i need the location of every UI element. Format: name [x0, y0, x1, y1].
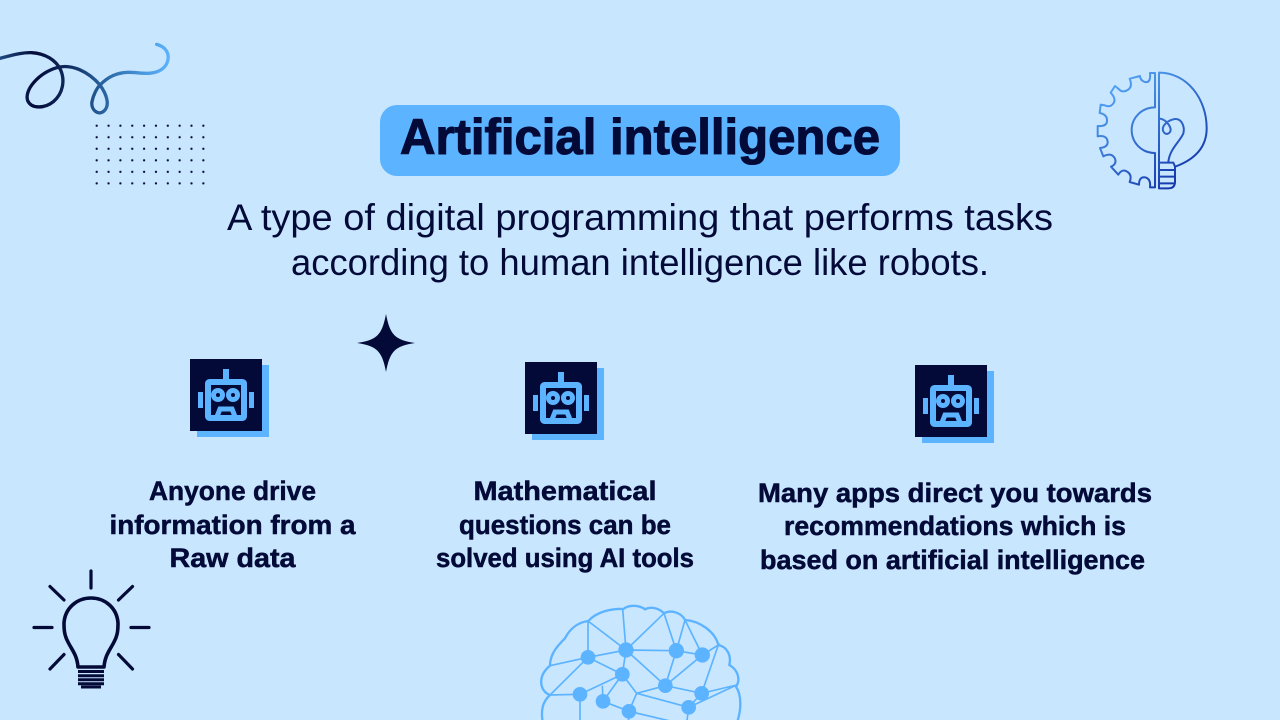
text block: raw data: Anyone drive: [149, 476, 316, 506]
icon: light bulb with rays: [34, 571, 149, 687]
title pill: [380, 105, 900, 176]
text block: mathematical questions: [436, 476, 694, 573]
network links: [550, 609, 737, 720]
decorative curl: [0, 44, 168, 113]
text block: mathematical questions: Mathematical: [474, 476, 656, 506]
icon: four-point star: [357, 314, 415, 372]
subtitle: [227, 197, 1053, 283]
icon: robot 3: [915, 365, 994, 443]
network nodes: [573, 642, 710, 719]
text block: app recommendations: recommendations which is: [784, 511, 1126, 541]
text block: app recommendations: Many apps direct you towards: [758, 478, 1152, 508]
title: Artificial intelligence: [400, 109, 880, 165]
subtitle: according to human intelligence like robots.: [291, 242, 989, 283]
subtitle: A type of digital programming that performs tasks: [227, 197, 1053, 238]
text block: app recommendations: based on artificial intelligence: [760, 545, 1145, 575]
brain outline: [541, 606, 740, 720]
text block: raw data: information from a: [110, 510, 357, 540]
icon: gear and light bulb: [1098, 73, 1207, 188]
text block: raw data: [110, 476, 357, 573]
text block: mathematical questions: solved using AI tools: [436, 543, 694, 573]
text block: app recommendations: [758, 478, 1152, 575]
icon: brain network: [541, 606, 740, 720]
text block: raw data: Raw data: [170, 543, 297, 573]
title background: [380, 105, 900, 176]
icon: robot 1: [190, 359, 269, 437]
text block: mathematical questions: questions can be: [459, 510, 671, 540]
icon: robot 2: [525, 362, 604, 440]
dot grid: [91, 120, 209, 189]
